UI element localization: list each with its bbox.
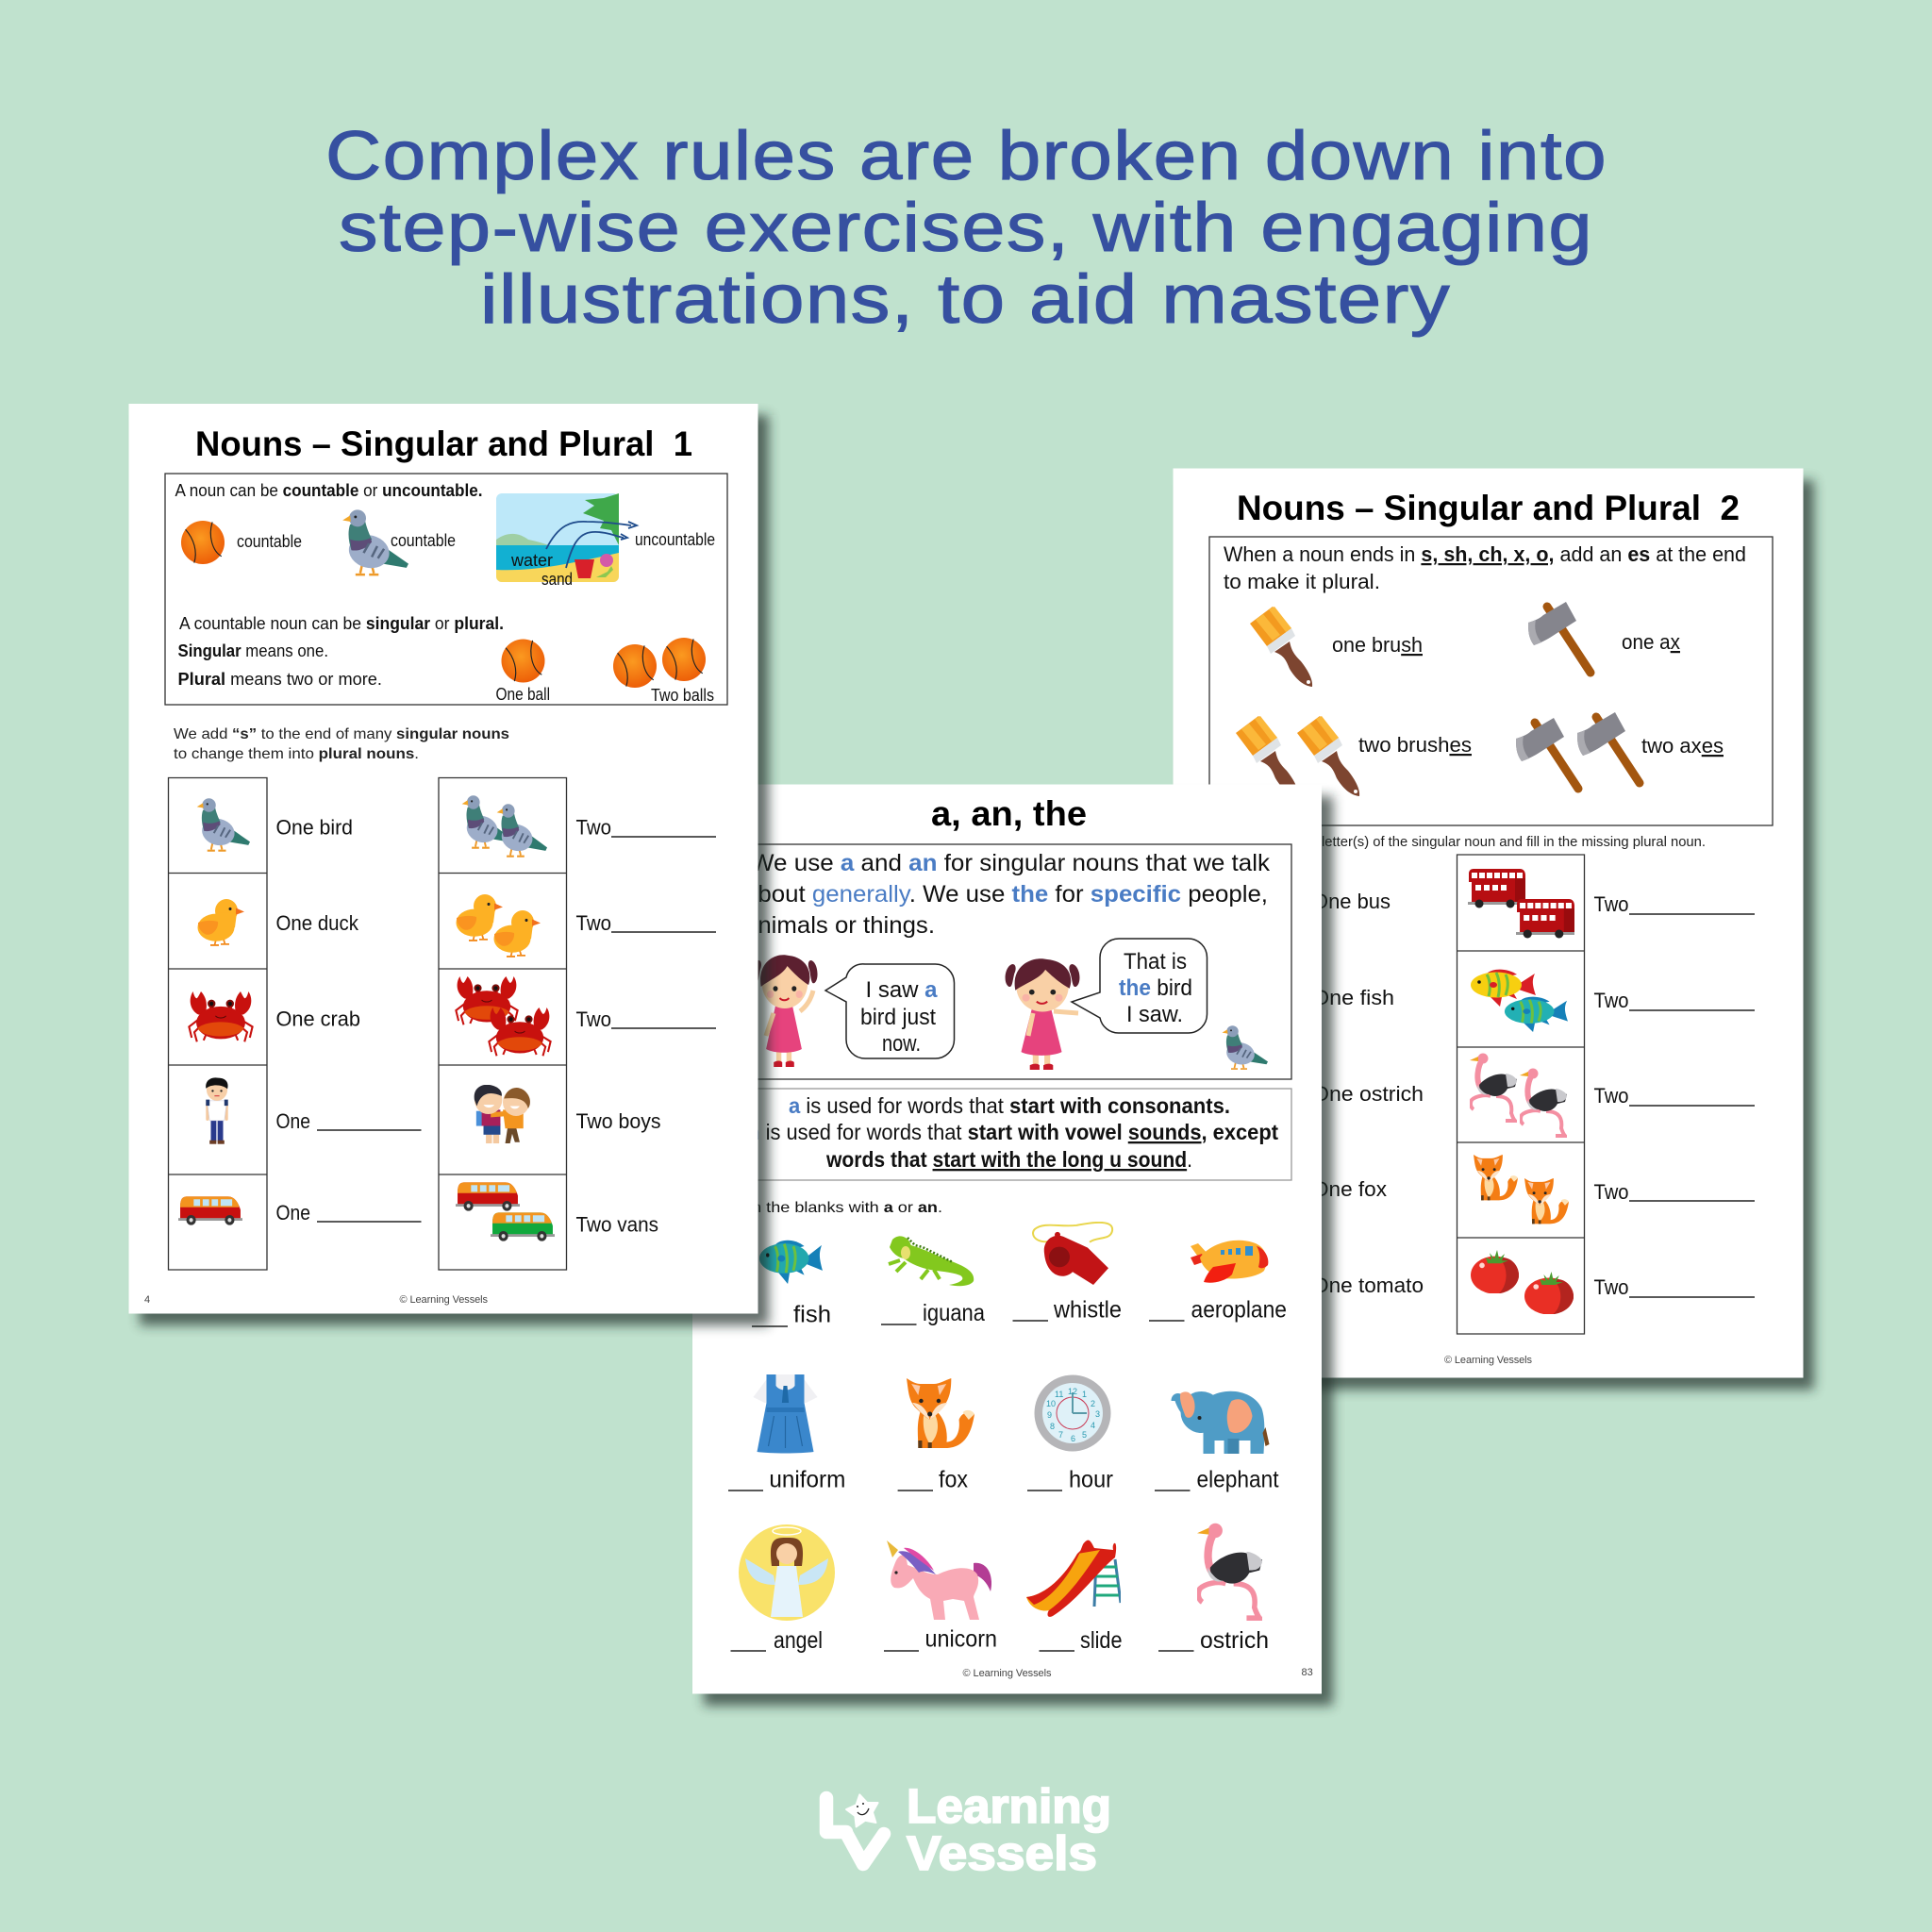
instruction: to change them into plural nouns . bbox=[174, 746, 419, 762]
table: singular labels: One fish bbox=[1312, 986, 1394, 1009]
icon: clock bbox=[1034, 1375, 1111, 1451]
icon: bird bbox=[197, 798, 250, 851]
footer: 4 bbox=[144, 1294, 150, 1306]
title: illustrations, to aid mastery bbox=[480, 261, 1451, 338]
heading: a, an, the bbox=[931, 794, 1087, 833]
label: countable: countable bbox=[237, 532, 302, 551]
usage box: a is used for words that start with consonants. bbox=[789, 1093, 1230, 1118]
panel: worksheet Nouns Singular and Plural 2 bbox=[1174, 468, 1814, 1390]
label: one ax: one ax bbox=[1622, 630, 1680, 654]
table: picture column bbox=[1457, 855, 1585, 1334]
icon: one ball bbox=[502, 640, 545, 683]
callout: That is the bird I saw: the bird bbox=[1119, 975, 1192, 1001]
table: plural picture column bbox=[439, 777, 566, 1270]
exercise: fish bbox=[752, 1241, 831, 1328]
icon: clock: 2 bbox=[1091, 1399, 1095, 1408]
icon: clock: 4 bbox=[1091, 1421, 1095, 1430]
wordmark: Learning bbox=[907, 1779, 1111, 1833]
rule box bbox=[1209, 537, 1773, 825]
heading: Nouns – Singular and Plural 1 bbox=[195, 425, 692, 463]
panel: worksheet a, an, the bbox=[692, 785, 1333, 1706]
icon: ball bbox=[181, 521, 225, 564]
icon: two brushes bbox=[1236, 716, 1359, 796]
icon: pigeon bbox=[1223, 1025, 1268, 1069]
text block: singular and plural: A countable noun can be singular or plural. bbox=[179, 614, 504, 633]
title bbox=[325, 118, 1607, 338]
row labels: singular: One crab bbox=[275, 1008, 360, 1030]
exercise: hour: hour bbox=[1069, 1466, 1113, 1492]
icon: two buses bbox=[1468, 869, 1574, 938]
icon: clock: 7 bbox=[1058, 1430, 1063, 1440]
label: two balls: Two balls bbox=[651, 686, 714, 705]
usage box: an is used for words that start with vowel sounds, except bbox=[736, 1120, 1278, 1144]
exercise: whistle bbox=[1013, 1223, 1122, 1323]
exercise: aeroplane bbox=[1149, 1241, 1287, 1323]
icon: clock: 1 bbox=[1082, 1390, 1087, 1399]
instruction: We add “s” to the end of many singular nouns bbox=[174, 726, 509, 742]
callout: I saw a bird just now: now. bbox=[882, 1031, 921, 1057]
footer: 83 bbox=[1302, 1667, 1313, 1678]
exercise: fish: fish bbox=[793, 1302, 831, 1328]
table: plural labels: Two bbox=[1594, 892, 1628, 916]
row labels: plural: Two vans bbox=[575, 1213, 658, 1236]
text block: singular and plural bbox=[177, 614, 504, 689]
rule box bbox=[729, 844, 1291, 1079]
exercise: unicorn bbox=[884, 1541, 997, 1653]
icon: girl pointing bbox=[1006, 958, 1079, 1070]
panel: worksheet Nouns Singular and Plural 1 bbox=[128, 404, 769, 1325]
label: one ball: One ball bbox=[496, 685, 550, 704]
table: singular labels bbox=[1312, 890, 1424, 1297]
row labels: singular: One duck bbox=[275, 911, 359, 935]
icon: clock: 12 bbox=[1068, 1387, 1077, 1396]
row labels: plural: Two bbox=[575, 911, 611, 935]
icon: clock: 5 bbox=[1082, 1430, 1087, 1440]
table: singular labels: One ostrich bbox=[1312, 1082, 1424, 1106]
icon: clock: 11 bbox=[1055, 1390, 1063, 1399]
arrow: sand to uncountable bbox=[566, 532, 627, 568]
row labels: singular bbox=[275, 815, 421, 1224]
row labels: singular: One bbox=[275, 1109, 310, 1133]
rule box: We use a and an for singular nouns that we talk bbox=[751, 850, 1271, 876]
table: singular picture column bbox=[168, 777, 267, 1270]
table: plural labels bbox=[1594, 892, 1755, 1299]
label: two brushes: two brushes bbox=[1358, 733, 1472, 757]
footer: © Learning Vessels bbox=[1444, 1355, 1532, 1366]
exercise: ostrich: ostrich bbox=[1200, 1627, 1269, 1654]
rule box: A noun can be countable or uncountable. bbox=[175, 481, 483, 500]
instruction: Fill in the blanks with a or an. bbox=[722, 1200, 942, 1216]
exercise: angel: angel bbox=[774, 1627, 823, 1654]
icon: clock: 6 bbox=[1071, 1434, 1075, 1443]
usage box bbox=[729, 1089, 1291, 1180]
icon: angel bbox=[739, 1524, 835, 1621]
row labels: plural: Two bbox=[575, 1008, 611, 1031]
icon: two birds bbox=[462, 795, 547, 857]
icon: crab bbox=[189, 991, 253, 1041]
exercise: iguana bbox=[881, 1236, 985, 1326]
arrow: water to uncountable bbox=[546, 522, 637, 549]
icon: two axes bbox=[1516, 712, 1640, 789]
callout: I saw a bird just now: bird just bbox=[860, 1005, 936, 1030]
usage box: words that start with the long u sound. bbox=[825, 1147, 1192, 1172]
icon: one axe bbox=[1528, 602, 1591, 673]
icon: two ducks bbox=[457, 894, 541, 957]
table: singular labels: One fox bbox=[1312, 1177, 1387, 1201]
icon: clock: 9 bbox=[1047, 1410, 1052, 1420]
exercise: slide: slide bbox=[1080, 1627, 1123, 1654]
icon: clock: 10 bbox=[1046, 1399, 1056, 1408]
instruction: letter(s) of the singular noun and fill in the missing plural noun. bbox=[1322, 834, 1706, 850]
icon: two ostriches bbox=[1470, 1053, 1567, 1136]
row labels: plural: Two boys bbox=[575, 1109, 660, 1133]
callout: That is the bird I saw: I saw. bbox=[1126, 1002, 1183, 1027]
exercise: elephant: elephant bbox=[1196, 1466, 1279, 1492]
icon: two balls bbox=[613, 638, 706, 688]
exercise: ostrich bbox=[1158, 1524, 1269, 1654]
table: singular labels: One tomato bbox=[1312, 1274, 1424, 1297]
table: plural labels: Two bbox=[1594, 1180, 1628, 1204]
icon: boy bbox=[206, 1077, 228, 1144]
callout: I saw a bird just now bbox=[825, 964, 955, 1058]
exercise: unicorn: unicorn bbox=[924, 1626, 997, 1653]
icon: girl waving bbox=[752, 955, 818, 1067]
row labels: plural bbox=[575, 815, 716, 1236]
icon: two boys bbox=[475, 1085, 530, 1143]
footer bbox=[962, 1667, 1313, 1679]
callout: That is the bird I saw: That is bbox=[1124, 949, 1187, 974]
exercise: angel bbox=[730, 1524, 835, 1654]
wordmark: Vessels bbox=[907, 1826, 1097, 1880]
icon: two crabs bbox=[456, 976, 551, 1056]
label: countable: countable bbox=[391, 531, 456, 550]
icon: two vans bbox=[456, 1182, 555, 1241]
footer bbox=[144, 1294, 489, 1306]
wordmark bbox=[907, 1779, 1111, 1880]
label: uncountable: uncountable bbox=[635, 530, 715, 549]
exercise: aeroplane: aeroplane bbox=[1191, 1296, 1287, 1323]
label: one brush: one brush bbox=[1332, 633, 1423, 657]
row labels: singular: One bird bbox=[275, 815, 353, 840]
rule box: When a noun ends in s, sh, ch, x, o, add an es at the end bbox=[1224, 542, 1746, 566]
exercise: uniform: uniform bbox=[769, 1466, 845, 1492]
exercise: slide bbox=[1026, 1541, 1123, 1654]
label: water: water bbox=[510, 551, 553, 570]
table: plural labels: Two bbox=[1594, 1084, 1628, 1108]
text block: singular and plural: Singular means one. bbox=[177, 641, 328, 660]
instruction bbox=[174, 726, 509, 762]
text block: singular and plural: Plural means two or more. bbox=[177, 670, 382, 689]
label: sand: sand bbox=[541, 570, 573, 589]
logo: Learning Vessels bbox=[826, 1779, 1111, 1880]
row labels: singular: One bbox=[275, 1201, 310, 1224]
exercise: whistle: whistle bbox=[1053, 1296, 1122, 1323]
rule box: animals or things. bbox=[744, 912, 935, 939]
icon: two foxes bbox=[1474, 1155, 1569, 1224]
rule box bbox=[165, 474, 727, 705]
icon: clock: 3 bbox=[1095, 1409, 1100, 1419]
icon: two tomatoes bbox=[1471, 1250, 1574, 1315]
rule box: about generally. We use the for specific people, bbox=[744, 881, 1268, 908]
icon: LV mark bbox=[826, 1791, 884, 1864]
footer: © Learning Vessels bbox=[962, 1668, 1052, 1679]
rule box: to make it plural. bbox=[1224, 570, 1380, 593]
table: plural labels: Two bbox=[1594, 989, 1628, 1012]
exercise: uniform bbox=[728, 1374, 845, 1492]
title: step-wise exercises, with engaging bbox=[339, 190, 1593, 266]
label: two axes: two axes bbox=[1641, 734, 1724, 758]
callout: I saw a bird just now: I saw a bbox=[866, 977, 938, 1003]
icon: two fish bbox=[1471, 970, 1568, 1032]
table: singular labels: One bus bbox=[1312, 890, 1391, 913]
icon: beach scene bbox=[496, 493, 619, 582]
footer: © Learning Vessels bbox=[400, 1294, 489, 1306]
exercise: iguana: iguana bbox=[923, 1300, 985, 1326]
row labels: plural: Two bbox=[575, 815, 611, 840]
icon: clock: 8 bbox=[1050, 1422, 1055, 1431]
title: Complex rules are broken down into bbox=[325, 118, 1607, 194]
icon: one brush bbox=[1250, 607, 1312, 687]
exercise: hour bbox=[1027, 1375, 1113, 1492]
exercise: fox: fox bbox=[939, 1466, 968, 1492]
callout: That is the bird I saw bbox=[1072, 939, 1208, 1033]
icon: duck bbox=[198, 899, 244, 945]
exercise: fox bbox=[898, 1378, 974, 1492]
heading: Nouns – Singular and Plural 2 bbox=[1237, 489, 1740, 527]
exercise: elephant bbox=[1155, 1391, 1279, 1492]
icon: pigeon bbox=[342, 509, 408, 575]
icon: van bbox=[178, 1196, 242, 1225]
table: plural labels: Two bbox=[1594, 1275, 1628, 1299]
